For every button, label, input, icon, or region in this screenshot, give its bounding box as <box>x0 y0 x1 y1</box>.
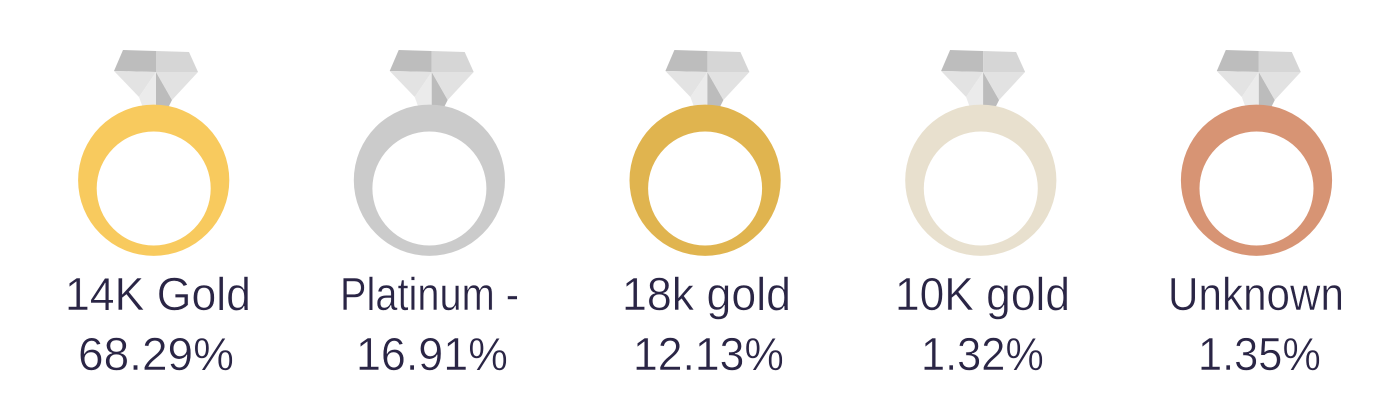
panel: unknown <box>1168 50 1344 380</box>
icon: ring band <box>354 105 505 256</box>
icon: ring band <box>1181 105 1332 256</box>
icon: diamond <box>390 50 474 108</box>
label: 14K Gold: 14K Gold <box>65 268 251 320</box>
icon: diamond <box>665 50 749 108</box>
icon: diamond <box>1217 50 1301 108</box>
panel: 18k gold <box>622 50 791 380</box>
value: 12.13%: 12.13% <box>633 328 784 380</box>
icon: ring band <box>905 105 1056 256</box>
panel: 10K gold <box>895 50 1070 380</box>
value: 68.29%: 68.29% <box>78 328 234 380</box>
value: 1.32%: 1.32% <box>921 328 1044 380</box>
icon: diamond <box>941 50 1025 108</box>
label: Platinum: Platinum - <box>340 268 519 320</box>
label: 10K gold: 10K gold <box>895 268 1070 320</box>
panel: 14K gold <box>65 50 251 380</box>
icon: diamond <box>114 50 198 108</box>
icon: ring band <box>78 105 229 256</box>
panel: platinum <box>340 50 519 380</box>
value: 1.35%: 1.35% <box>1198 328 1321 380</box>
icon: ring band <box>630 105 781 256</box>
label: Unknown: Unknown <box>1168 268 1344 320</box>
label: 18k gold: 18k gold <box>622 268 791 320</box>
value: 16.91%: 16.91% <box>356 328 508 380</box>
